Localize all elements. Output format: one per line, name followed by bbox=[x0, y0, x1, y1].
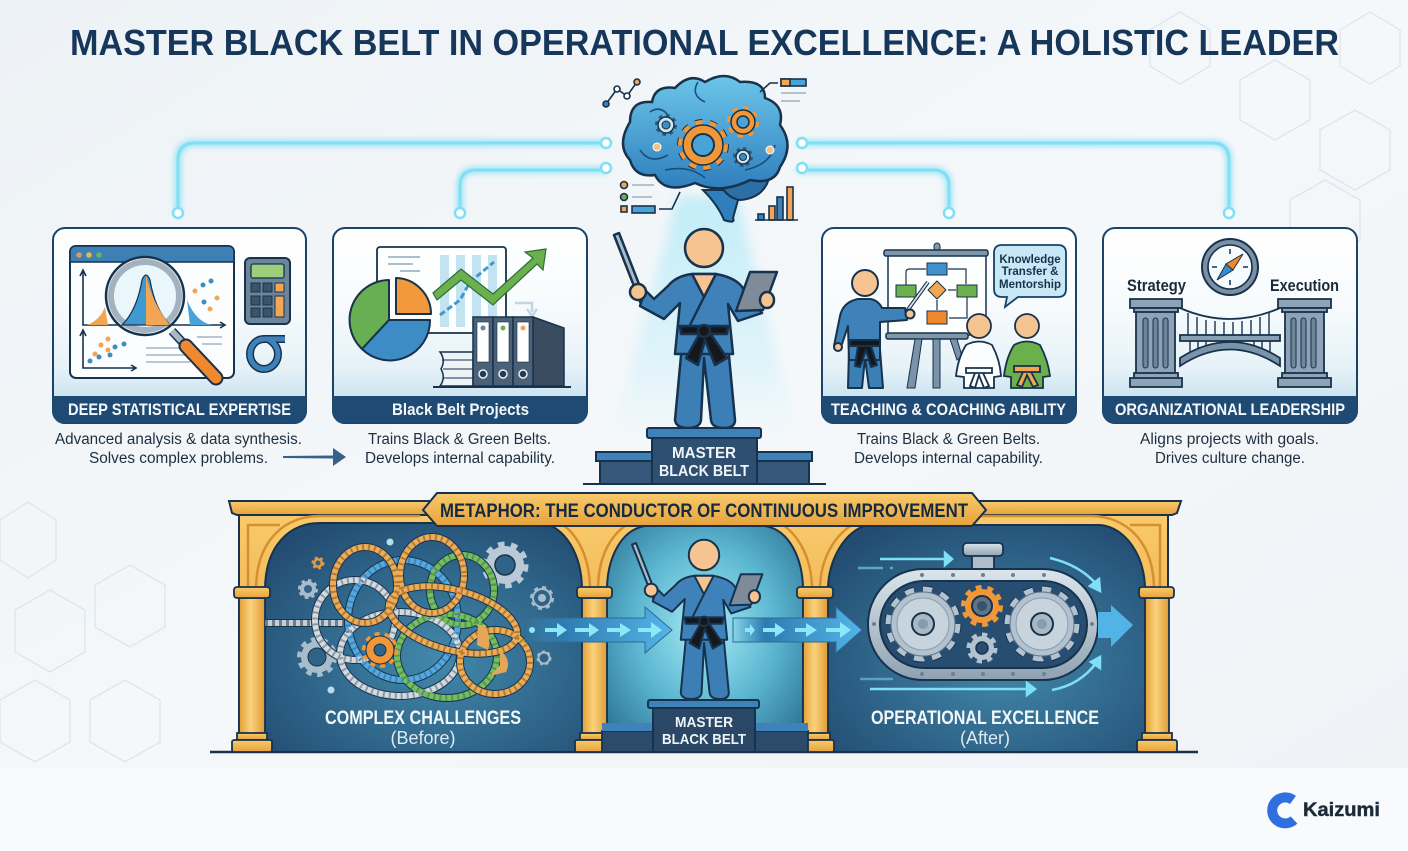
text block: organizational leadership: Drives culture change. bbox=[1155, 450, 1305, 467]
icon: bridge between pillars bbox=[1130, 299, 1331, 387]
text block: deep statistical expertise bbox=[55, 431, 302, 467]
panel: black belt projects bbox=[333, 228, 587, 423]
icon: binders and books bbox=[433, 317, 571, 387]
text block: black belt projects: Trains Black & Green Belts. bbox=[368, 431, 551, 448]
panel: deep statistical expertise bbox=[53, 228, 306, 423]
orange ropes bbox=[333, 537, 530, 694]
logo: Kaizumi bbox=[1272, 797, 1380, 823]
podium: Master Black Belt: MASTER bbox=[672, 445, 736, 462]
callout: knowledge transfer: Knowledge bbox=[999, 254, 1061, 266]
arrow: output bbox=[1098, 605, 1133, 647]
label: operational excellence after: OPERATIONAL EXCELLENCE bbox=[871, 708, 1099, 729]
footer band bbox=[0, 768, 1408, 851]
text block: deep statistical expertise: Advanced analysis & data synthesis. bbox=[55, 431, 302, 448]
icon: compass bbox=[1202, 239, 1258, 295]
label: operational excellence after bbox=[871, 708, 1099, 748]
icon: brain with gears bbox=[623, 76, 788, 222]
text block: black belt projects bbox=[365, 431, 555, 467]
connectors: glowing lines from brain to cards bbox=[173, 138, 1234, 218]
icon: green belt student bbox=[1004, 314, 1050, 388]
panel: operational excellence bbox=[828, 525, 1145, 752]
text block: deep statistical expertise: Solves complex problems. bbox=[89, 450, 268, 467]
pillars bbox=[232, 587, 1177, 752]
banner: metaphor heading: METAPHOR: THE CONDUCTOR OF CONTINUOUS IMPROVEMENT bbox=[440, 501, 968, 522]
label: complex challenges before: (Before) bbox=[390, 728, 456, 748]
podium: Master Black Belt bbox=[583, 428, 826, 484]
machine: operational excellence bbox=[868, 543, 1098, 680]
icon: pie chart bbox=[350, 278, 431, 360]
title: MASTER BLACK BELT IN OPERATIONAL EXCELLENCE: A HOLISTIC LEADER bbox=[70, 22, 1339, 63]
icon: data accents around brain bbox=[603, 79, 806, 220]
icon: screen with chart bbox=[377, 247, 537, 333]
label: operational excellence after: (After) bbox=[960, 728, 1010, 748]
icon: analytics window with magnifier bbox=[70, 246, 234, 378]
icon: teacher figure bbox=[834, 270, 928, 388]
heading: DEEP STATISTICAL EXPERTISE bbox=[68, 401, 291, 419]
podium: lower Master Black Belt: BLACK BELT bbox=[662, 731, 746, 748]
arrow: complex to conductor bbox=[525, 607, 672, 653]
logo: Kaizumi: Kaizumi bbox=[1303, 800, 1380, 821]
central figure: Master Black Belt bbox=[614, 229, 777, 428]
text block: organizational leadership: Aligns projects with goals. bbox=[1140, 431, 1319, 448]
heading: Black Belt Projects bbox=[392, 401, 529, 419]
gear: orange centre tangle bbox=[365, 635, 395, 665]
motion arrows bbox=[858, 553, 1100, 695]
podium: lower Master Black Belt bbox=[602, 700, 808, 752]
tangled gears bbox=[300, 538, 552, 694]
banner: metaphor heading bbox=[423, 493, 986, 526]
text block: teaching and coaching: Trains Black & Green Belts. bbox=[857, 431, 1040, 448]
icon: growth arrow bbox=[433, 249, 546, 305]
panel: teaching and coaching ability bbox=[822, 228, 1076, 423]
gear: orange large bbox=[682, 124, 724, 166]
panel: complex challenges bbox=[265, 523, 582, 752]
arrow: conductor to excellence bbox=[733, 607, 862, 653]
gold arcade frame bbox=[210, 501, 1198, 752]
heading: ORGANIZATIONAL LEADERSHIP bbox=[1115, 401, 1345, 419]
label: execution: Execution bbox=[1270, 277, 1339, 295]
arrow between captions bbox=[283, 448, 346, 466]
icon: sigma bbox=[250, 339, 285, 369]
label: complex challenges before: COMPLEX CHALLENGES bbox=[325, 708, 521, 729]
icon: white belt student bbox=[956, 314, 1001, 388]
callout: knowledge transfer bbox=[994, 245, 1066, 307]
podium: lower Master Black Belt: MASTER bbox=[675, 714, 733, 731]
panel: conductor bbox=[607, 526, 803, 752]
icon: flipchart with flow diagram bbox=[884, 243, 988, 388]
heading: TEACHING & COACHING ABILITY bbox=[831, 401, 1066, 419]
text block: black belt projects: Develops internal capability. bbox=[365, 450, 555, 467]
text block: teaching and coaching bbox=[854, 431, 1043, 467]
text block: teaching and coaching: Develops internal capability. bbox=[854, 450, 1043, 467]
panel: metaphor arcade bbox=[210, 493, 1198, 752]
conductor figure bbox=[632, 540, 762, 699]
text block: organizational leadership bbox=[1140, 431, 1319, 467]
icon: calculator bbox=[245, 258, 290, 324]
label: complex challenges before bbox=[325, 708, 521, 748]
callout: knowledge transfer: Transfer & bbox=[1002, 266, 1058, 278]
label: strategy: Strategy bbox=[1127, 277, 1187, 295]
central light beam bbox=[613, 197, 797, 437]
callout: knowledge transfer: Mentorship bbox=[999, 279, 1061, 291]
podium: Master Black Belt: BLACK BELT bbox=[659, 463, 749, 480]
tangled ropes bbox=[265, 555, 497, 698]
panel: organizational leadership bbox=[1103, 228, 1357, 423]
